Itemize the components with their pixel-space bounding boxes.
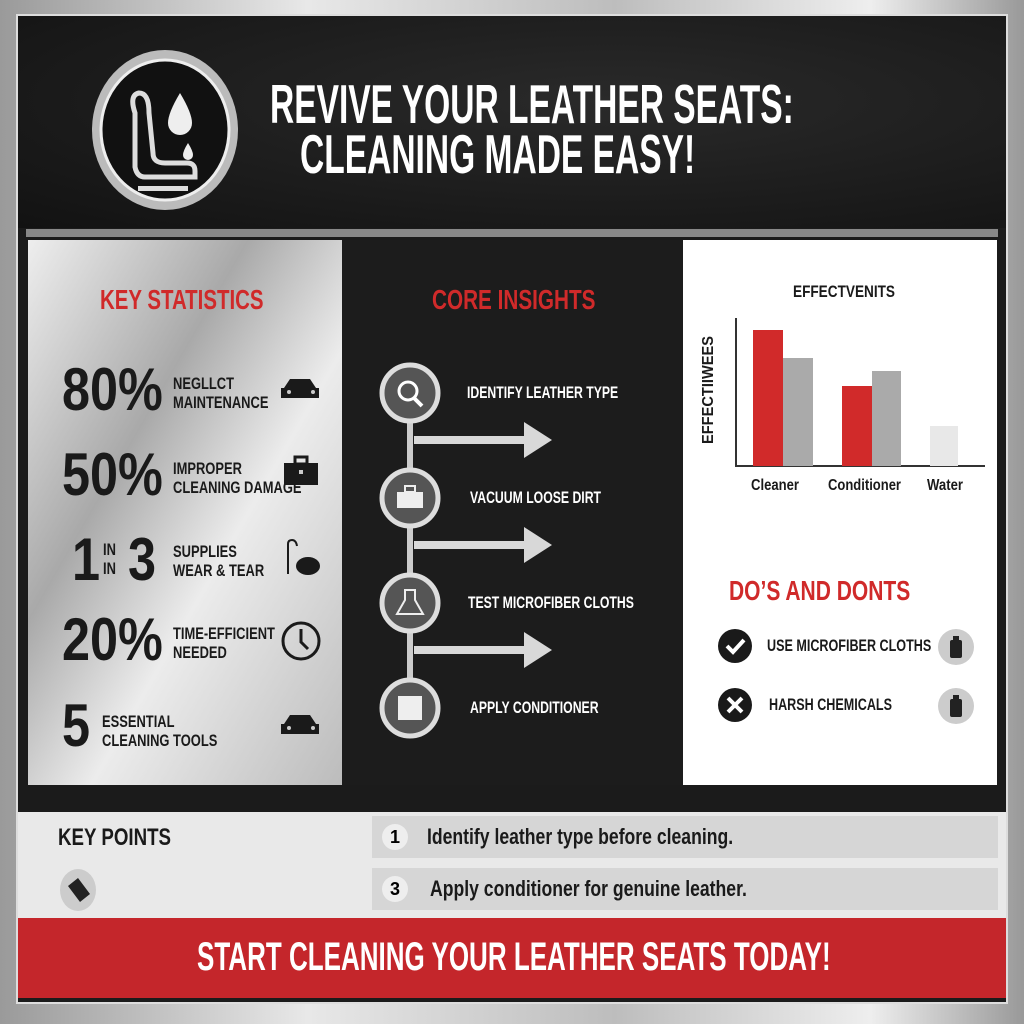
- panel: core insights: [342, 240, 683, 785]
- panel: effectiveness and do's: [683, 240, 997, 785]
- dont item: [718, 688, 974, 724]
- stat 20%: TIME-EFFICIENT: [173, 624, 275, 643]
- step labels: IDENTIFY LEATHER TYPE: [467, 383, 618, 402]
- stat 20%: 20%: [62, 606, 163, 673]
- stat 80%: 80%: [62, 356, 163, 423]
- bar chart: [700, 318, 985, 494]
- icon: tag: [60, 869, 96, 911]
- point 3: Apply conditioner for genuine leather.: [430, 876, 747, 901]
- heading: key statistics: KEY STATISTICS: [100, 284, 264, 315]
- stat 5 tools: CLEANING TOOLS: [102, 731, 217, 750]
- divider bar: [26, 229, 998, 237]
- bar chart: EFFECTIIWEES: [700, 336, 717, 444]
- heading: dos and donts: DO’S AND DONTS: [729, 575, 910, 606]
- heading: key points: KEY POINTS: [58, 824, 171, 851]
- flow diagram: [380, 362, 552, 738]
- stat 80%: MAINTENANCE: [173, 393, 268, 412]
- heading: core insights: CORE INSIGHTS: [432, 284, 595, 315]
- bar chart: Cleaner: [751, 477, 799, 494]
- stat 1 in 3: 3: [128, 526, 156, 593]
- icon: seat and drop badge: [92, 50, 238, 210]
- dont item: HARSH CHEMICALS: [769, 695, 892, 714]
- point 3: [372, 868, 998, 910]
- point 3: 3: [390, 879, 400, 899]
- stat 5 tools: 5: [62, 692, 90, 759]
- stat 80%: NEGLLCT: [173, 374, 234, 393]
- key points section: [18, 812, 1006, 918]
- do item: [718, 629, 974, 665]
- stat 1 in 3: 1: [72, 526, 100, 593]
- panel: key statistics: [28, 240, 342, 785]
- chart title: EFFECTVENITS: [793, 282, 895, 301]
- stat 5 tools: [62, 692, 319, 759]
- do item: USE MICROFIBER CLOTHS: [767, 636, 931, 655]
- title: REVIVE YOUR LEATHER SEATS:: [270, 73, 794, 135]
- panel: core insights: TEST MICROFIBER CLOTHS: [468, 593, 634, 612]
- bar chart: Water: [927, 477, 963, 494]
- stat 20%: [62, 606, 320, 673]
- point 1: 1: [390, 827, 400, 847]
- stat 50%: CLEANING DAMAGE: [173, 478, 301, 497]
- header: [18, 16, 1006, 228]
- call to action banner: START CLEANING YOUR LEATHER SEATS TODAY!: [197, 935, 831, 979]
- stat 20%: NEEDED: [173, 643, 227, 662]
- stat 1 in 3: [72, 526, 320, 593]
- stat 1 in 3: WEAR & TEAR: [173, 561, 264, 580]
- stat 50%: IMPROPER: [173, 459, 242, 478]
- point 1: [372, 816, 998, 858]
- point 1: Identify leather type before cleaning.: [427, 824, 733, 849]
- stat 1 in 3: SUPPLIES: [173, 542, 237, 561]
- stat 50%: 50%: [62, 441, 163, 508]
- stat 1 in 3: IN: [103, 540, 116, 559]
- stat 5 tools: ESSENTIAL: [102, 712, 175, 731]
- panel: core insights: VACUUM LOOSE DIRT: [470, 488, 601, 507]
- stat 50%: [62, 441, 318, 508]
- stat 80%: [62, 356, 319, 423]
- panel: core insights: APPLY CONDITIONER: [470, 698, 599, 717]
- title: CLEANING MADE EASY!: [300, 123, 695, 185]
- bar chart: Conditioner: [828, 477, 901, 494]
- call to action banner: [18, 918, 1006, 998]
- stat 1 in 3: IN: [103, 559, 116, 578]
- title: [270, 73, 794, 185]
